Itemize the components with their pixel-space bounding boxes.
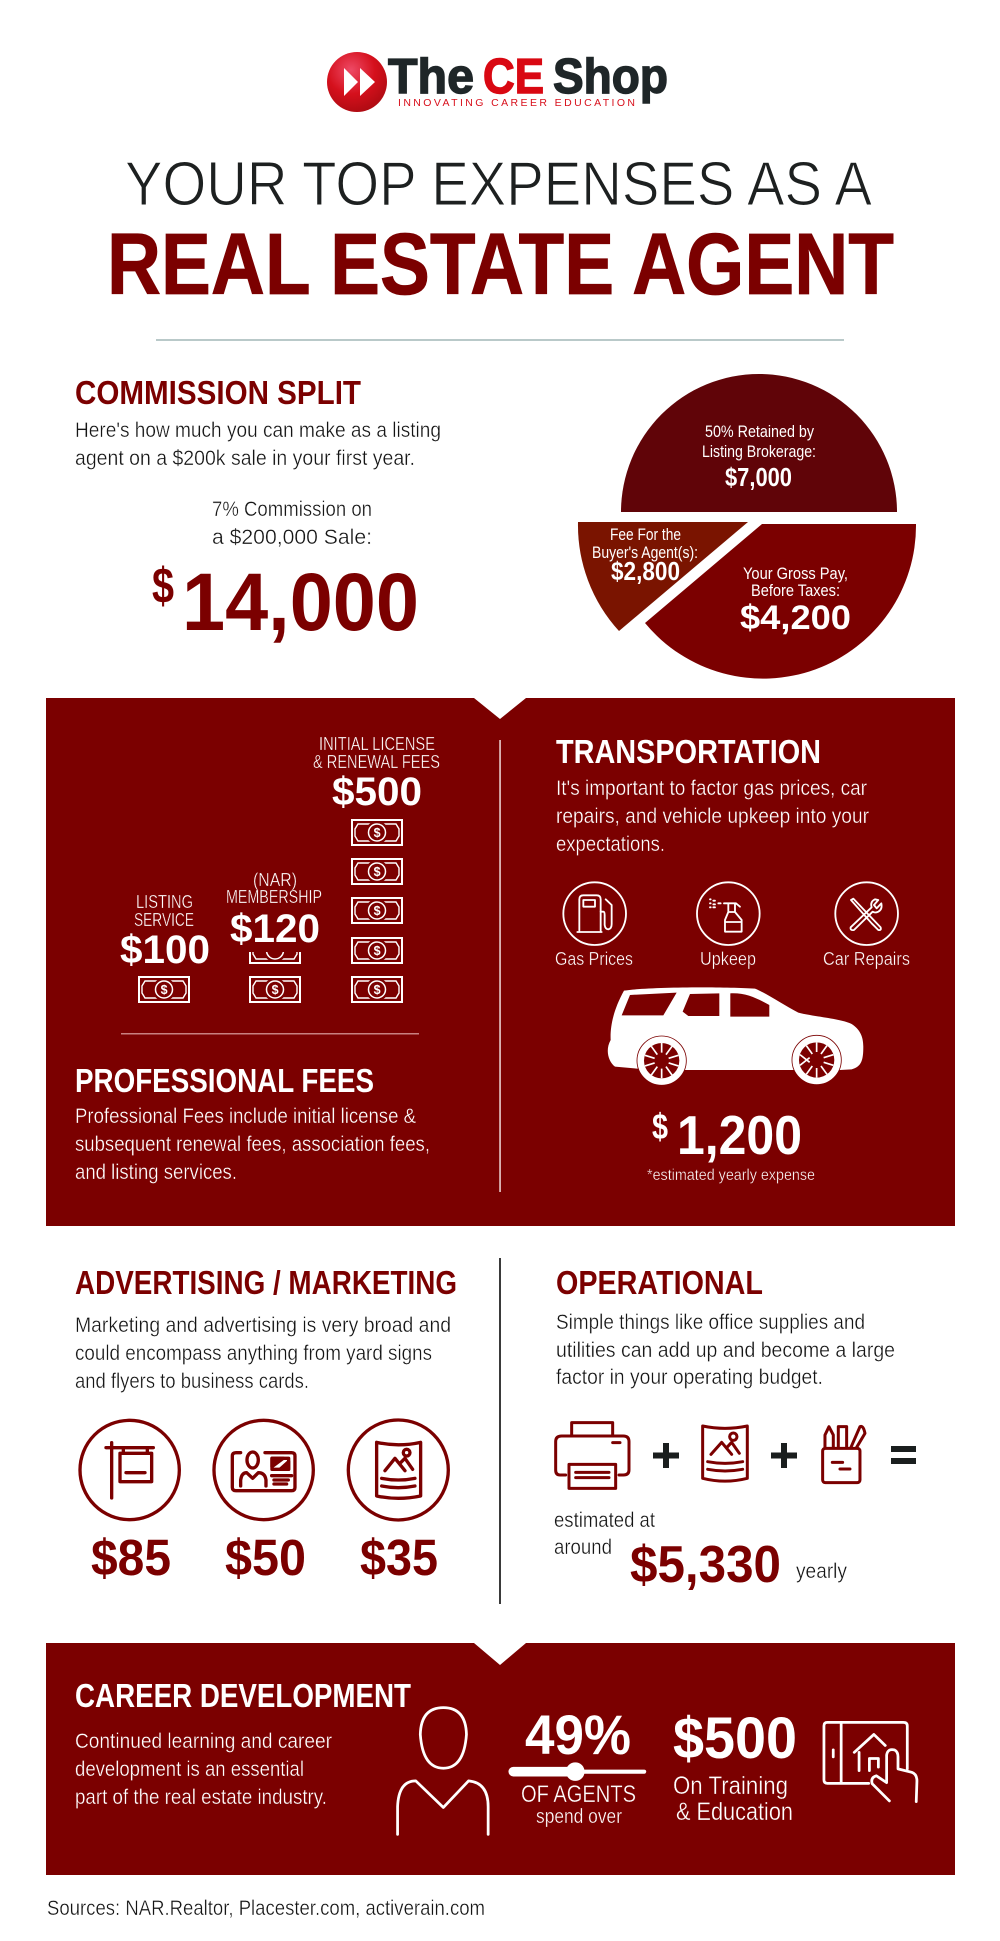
amounts: $85 $50 $35: $50 — [225, 1529, 306, 1586]
operational description: factor in your operating budget. — [556, 1366, 823, 1389]
logo wordmark — [388, 50, 668, 104]
operational description — [556, 1311, 895, 1389]
icon: dollar bill: $ — [374, 944, 381, 958]
heading: professional fees: PROFESSIONAL FEES — [75, 1062, 374, 1099]
career description — [75, 1730, 332, 1809]
icon: gas pump — [563, 882, 626, 945]
bar of bills: NAR membership: (NAR) — [253, 869, 297, 890]
transportation description: expectations. — [556, 833, 665, 856]
big number: $14,000: 14,000 — [182, 557, 419, 648]
slice: brokerage: Listing Brokerage: — [702, 442, 816, 461]
commission description: Here's how much you can make as a listing — [75, 419, 441, 442]
heading: commission split: COMMISSION SPLIT — [75, 374, 361, 411]
icon: dollar bill — [352, 977, 402, 1002]
icon: car — [608, 987, 863, 1085]
operational estimate: estimated at — [554, 1509, 655, 1532]
bar of bills: NAR membership: MEMBERSHIP — [226, 886, 322, 907]
stat: 49% of agents: 49% — [525, 1703, 631, 1766]
bar of bills: license fees: & RENEWAL FEES — [313, 751, 440, 772]
icon: dollar bill — [352, 898, 402, 923]
icon: yard sign — [80, 1420, 179, 1520]
slice: gross pay — [645, 524, 916, 679]
slice: gross pay: Before Taxes: — [751, 581, 840, 600]
bar of bills: listing service — [120, 891, 210, 1002]
panel: career development — [46, 1643, 955, 1875]
operational estimate: around — [554, 1536, 612, 1559]
commission basis — [212, 498, 372, 549]
heading: operational: OPERATIONAL — [556, 1264, 763, 1301]
professional fees description: Professional Fees include initial license & — [75, 1105, 416, 1128]
logo: The CE Shop — [327, 50, 668, 112]
stat: $500 on training: On Training — [673, 1772, 788, 1800]
title — [107, 150, 894, 313]
sources: Sources: NAR.Realtor, Placester.com, activerain.com — [47, 1897, 485, 1920]
career description: Continued learning and career — [75, 1730, 332, 1753]
panel: commission split — [75, 374, 916, 679]
transportation description — [556, 777, 869, 856]
icon labels: Car Repairs — [823, 949, 910, 969]
bar of bills: license fees — [313, 733, 440, 1002]
professional fees description — [75, 1105, 430, 1184]
stat: 49% of agents: OF AGENTS — [521, 1781, 636, 1808]
bar of bills: license fees: $500 — [332, 770, 422, 814]
big number: $14,000: $ — [152, 558, 174, 614]
icon labels: Upkeep — [700, 949, 756, 969]
icon: pencil cup — [823, 1426, 865, 1483]
big number: $1,200: 1,200 — [677, 1104, 802, 1166]
icon: dollar bill: $ — [161, 983, 168, 997]
icon: equals — [891, 1446, 916, 1464]
panel: operational — [554, 1264, 916, 1594]
bar of bills: listing service: LISTING — [136, 891, 193, 912]
logo wordmark: The — [388, 50, 474, 104]
icon: dollar bill: $ — [374, 826, 381, 840]
amounts: $85 $50 $35: $35 — [360, 1529, 438, 1586]
icon: plus — [653, 1443, 679, 1468]
operational estimate — [554, 1509, 847, 1594]
icon: tablet with house — [824, 1722, 917, 1802]
operational description: Simple things like office supplies and — [556, 1311, 865, 1334]
icon: wrench and screwdriver — [835, 882, 898, 945]
icon: flyer — [703, 1426, 747, 1481]
bar of bills: NAR membership: $120 — [230, 907, 320, 951]
commission basis: 7% Commission on — [212, 498, 372, 521]
icon: dollar bill — [352, 820, 402, 845]
icon labels — [555, 949, 910, 969]
advertising description: could encompass anything from yard signs — [75, 1342, 432, 1365]
icon: spray bottle — [697, 882, 760, 945]
slice: buyer's agent: Fee For the — [610, 525, 681, 544]
slice: gross pay: Your Gross Pay, — [743, 564, 848, 583]
slice: buyer's agent: $2,800 — [611, 556, 680, 586]
heading: career development: CAREER DEVELOPMENT — [75, 1677, 411, 1714]
stat: $500 on training: & Education — [676, 1798, 793, 1826]
slider graphic — [513, 1762, 644, 1781]
icon: dollar bill: $ — [272, 983, 279, 997]
amounts: $85 $50 $35: $85 — [91, 1529, 171, 1586]
logo tagline: INNOVATING CAREER EDUCATION — [398, 97, 635, 109]
slice: buyer's agent — [578, 522, 748, 631]
commission basis: a $200,000 Sale: — [212, 526, 372, 549]
panel: professional fees and transportation — [46, 698, 955, 1226]
panel: advertising and marketing — [75, 1264, 457, 1586]
transportation description: It's important to factor gas prices, car — [556, 777, 867, 800]
transportation description: repairs, and vehicle upkeep into your — [556, 805, 869, 828]
professional fees description: subsequent renewal fees, association fees, — [75, 1133, 430, 1156]
slice: brokerage — [621, 374, 897, 512]
pie chart — [578, 374, 916, 679]
professional fees description: and listing services. — [75, 1161, 237, 1184]
heading: advertising / marketing: ADVERTISING / MARKETING — [75, 1264, 457, 1301]
stat: 49% of agents: spend over — [536, 1806, 622, 1828]
bar of bills: listing service: $100 — [120, 928, 210, 972]
heading: transportation: TRANSPORTATION — [556, 733, 821, 770]
operational estimate: yearly — [796, 1560, 847, 1583]
icon: dollar bill: $ — [374, 865, 381, 879]
career description: development is an essential — [75, 1758, 304, 1781]
icon: dollar bill: $ — [374, 983, 381, 997]
slice: gross pay: $4,200 — [740, 599, 851, 637]
icon: business card — [214, 1420, 313, 1520]
icon: flyer — [348, 1420, 448, 1520]
icon: person — [398, 1708, 488, 1834]
icon: dollar bill — [352, 859, 402, 884]
icon: dollar bill: $ — [374, 904, 381, 918]
slice: brokerage: 50% Retained by — [705, 422, 814, 441]
big number: $1,200: $ — [652, 1106, 668, 1147]
advertising description: Marketing and advertising is very broad and — [75, 1314, 451, 1337]
stat: $500 on training: $500 — [673, 1706, 797, 1771]
bar of bills: license fees: INITIAL LICENSE — [319, 733, 435, 754]
stat: 49% of agents — [513, 1703, 644, 1828]
icon labels: Gas Prices — [555, 949, 633, 969]
logo wordmark: Shop — [553, 50, 668, 104]
advertising description — [75, 1314, 451, 1393]
footnote: estimated yearly expense: *estimated yearly expense — [647, 1167, 815, 1184]
commission description — [75, 419, 441, 470]
stat: $500 on training — [673, 1706, 797, 1826]
icon: printer — [556, 1423, 629, 1488]
advertising description: and flyers to business cards. — [75, 1370, 309, 1393]
operational estimate: $5,330 — [630, 1536, 781, 1594]
slice: brokerage: $7,000 — [725, 462, 792, 492]
commission description: agent on a $200k sale in your first year. — [75, 447, 415, 470]
icon: dollar bill — [352, 938, 402, 963]
title: YOUR TOP EXPENSES AS A — [125, 150, 873, 219]
slice: buyer's agent: Buyer's Agent(s): — [592, 543, 698, 562]
bar of bills: NAR membership — [226, 869, 322, 1002]
logo wordmark: CE — [483, 50, 544, 104]
icon: plus — [771, 1443, 797, 1468]
career description: part of the real estate industry. — [75, 1786, 327, 1809]
operational description: utilities can add up and become a large — [556, 1339, 895, 1362]
title: REAL ESTATE AGENT — [107, 216, 894, 313]
bar of bills: listing service: SERVICE — [134, 909, 194, 930]
icon: fast-forward badge — [327, 52, 387, 112]
amounts: $85 $50 $35 — [91, 1529, 438, 1586]
